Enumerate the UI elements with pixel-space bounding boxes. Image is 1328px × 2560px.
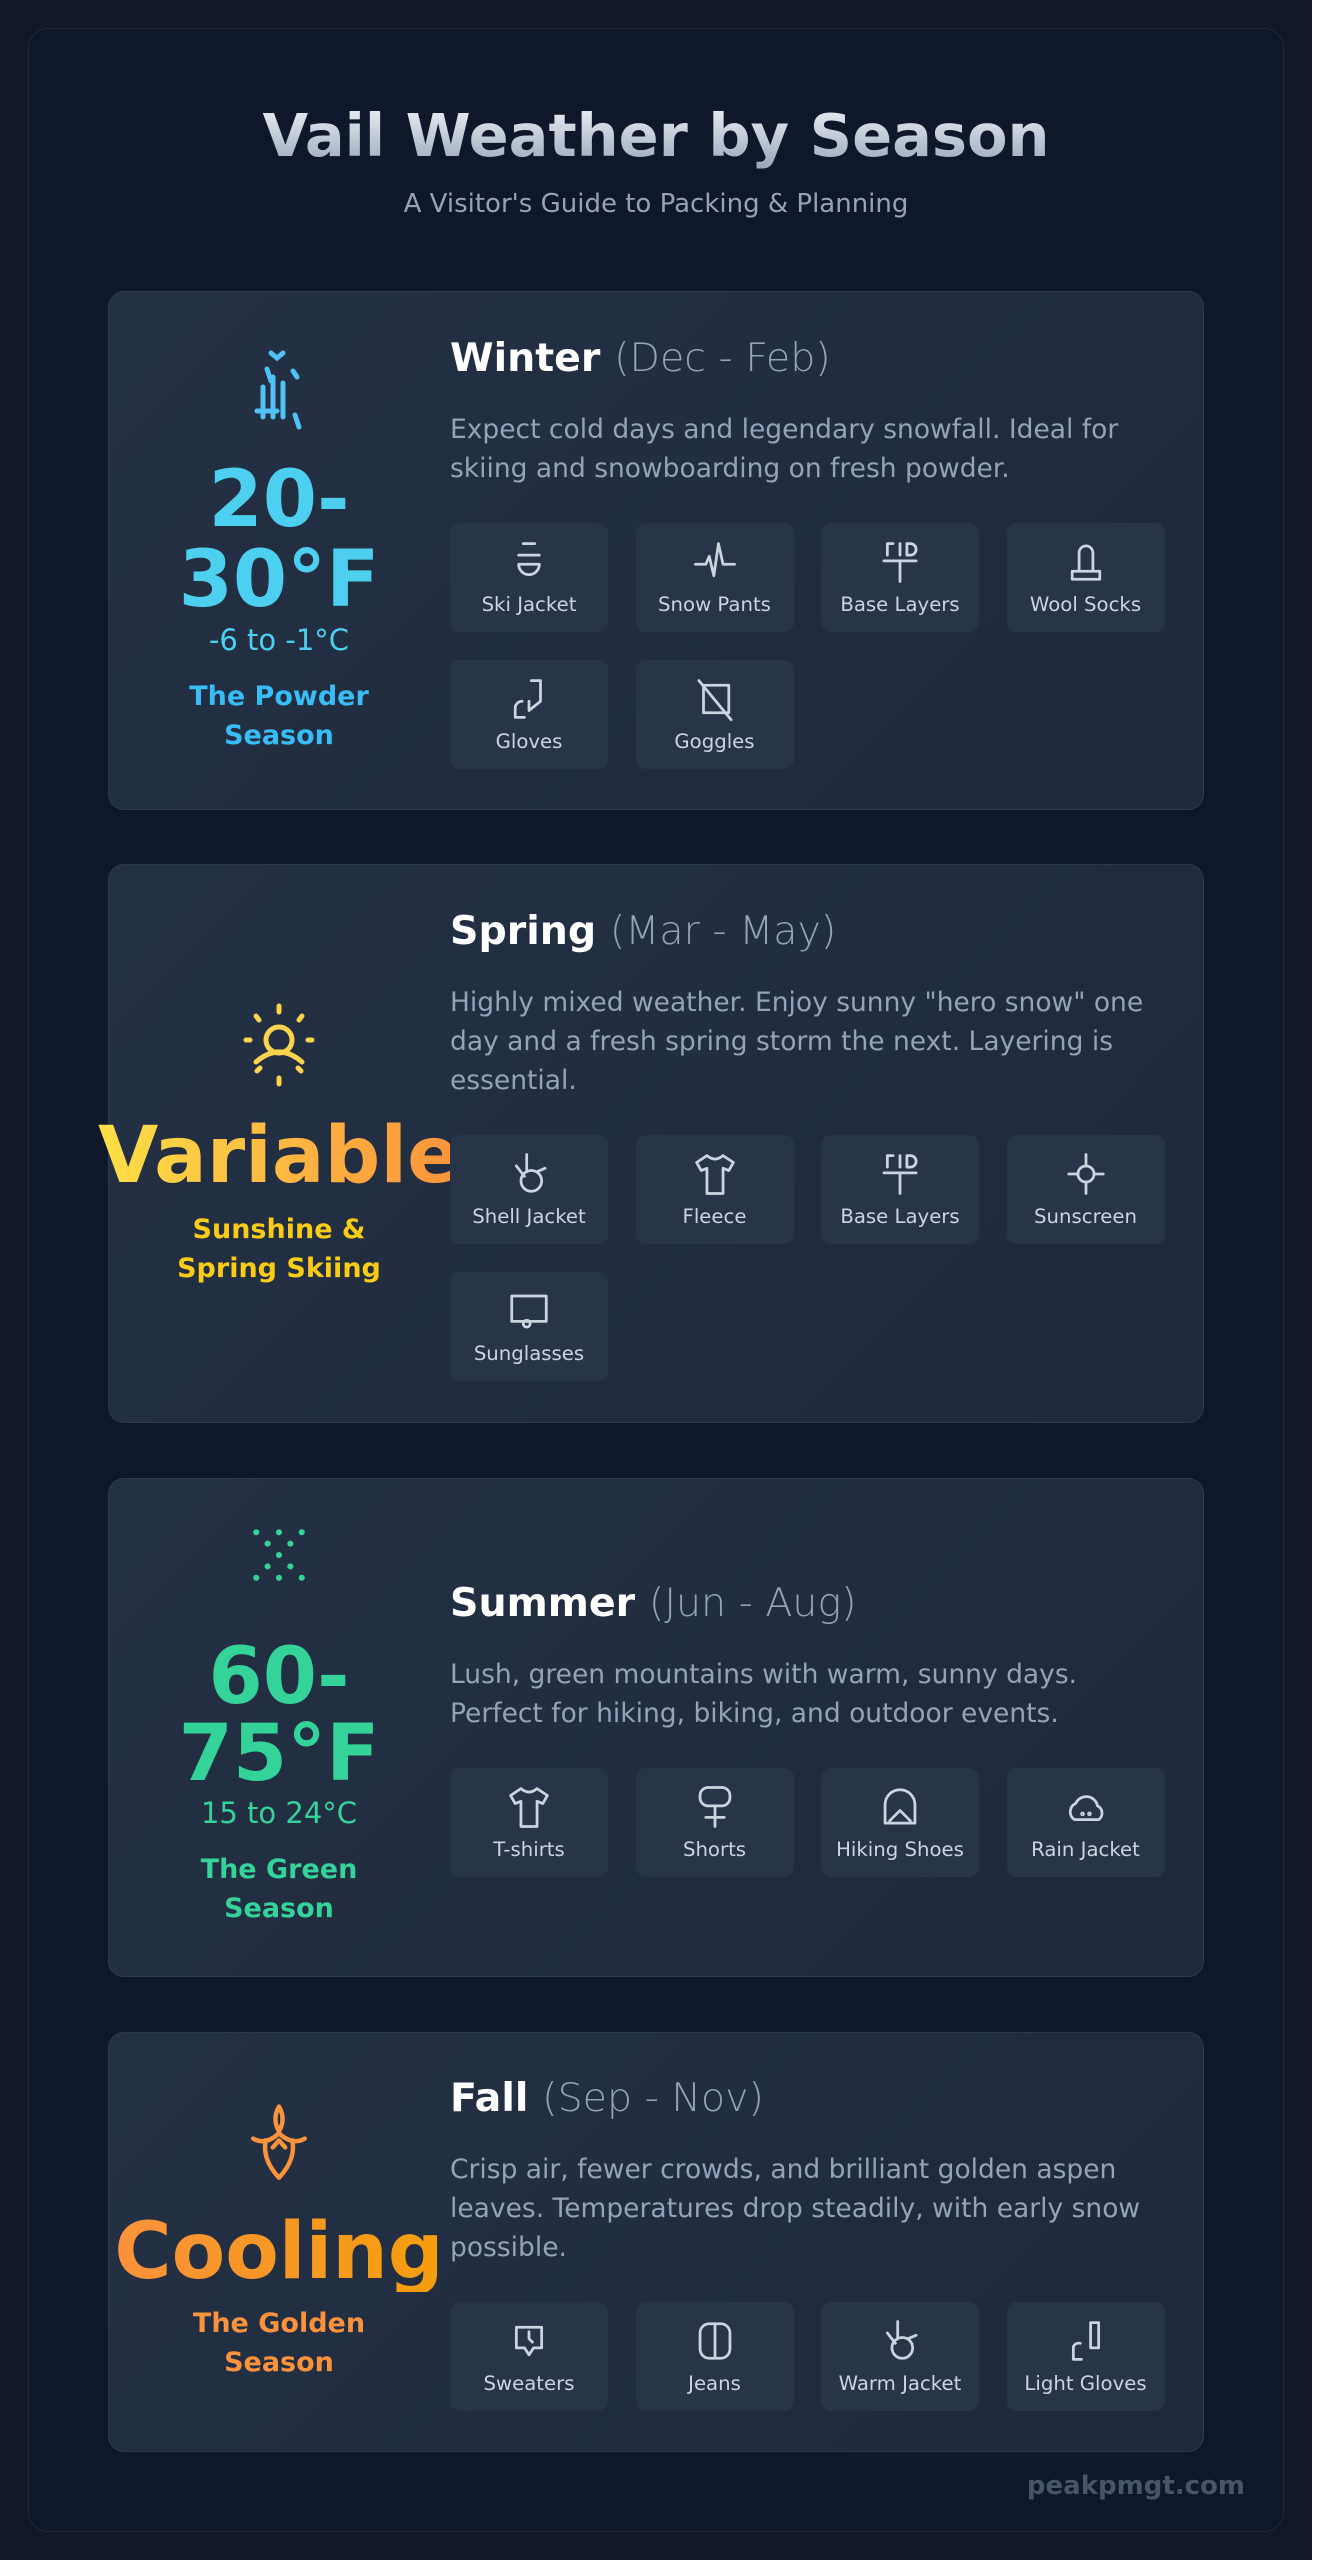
summer temperature column: Season — [224, 1893, 334, 1924]
panel: fall — [108, 2032, 1204, 2452]
packing list: summer: Hiking Shoes — [836, 1838, 964, 1861]
text: winter description: Expect cold days and legendary snowfall. Ideal for skiing and snowboarding on fresh powder. — [450, 414, 1118, 484]
summer details — [450, 1580, 1165, 1877]
winter details — [450, 334, 1165, 769]
packing list: winter: Base Layers — [840, 592, 960, 616]
icon: sparkle dots — [253, 1529, 305, 1581]
packing list: winter — [482, 523, 1165, 769]
spring temperature column — [98, 1004, 460, 1284]
winter temperature column: The Powder — [189, 681, 369, 712]
icon: leaf — [251, 2104, 307, 2180]
text: spring description: Highly mixed weather. Enjoy sunny "hero snow" one day and a fresh spring storm the next. Layering is essential. — [450, 987, 1143, 1096]
icon: snow — [254, 350, 302, 430]
panel: spring — [108, 864, 1204, 1423]
packing list: spring: Fleece — [683, 1205, 746, 1228]
winter temperature column: Season — [224, 720, 334, 751]
summer temperature column — [179, 1529, 379, 1924]
packing list: spring: Sunglasses — [474, 1342, 584, 1365]
packing list: fall: Light Gloves — [1024, 2372, 1147, 2395]
title — [0, 100, 1312, 172]
spring temperature column: Sunshine & — [193, 1214, 365, 1244]
heading: fall: Fall (Sep - Nov) — [450, 2075, 764, 2121]
packing list: spring: Sunscreen — [1034, 1205, 1137, 1228]
packing list: spring: Base Layers — [840, 1205, 960, 1228]
packing list: winter: Snow Pants — [658, 592, 771, 616]
packing list: winter: Wool Socks — [1030, 592, 1141, 616]
panel: winter — [108, 291, 1204, 810]
summer temperature column: 15 to 24°C — [201, 1796, 357, 1830]
packing list: summer: T-shirts — [493, 1838, 565, 1861]
spring details — [450, 908, 1165, 1381]
packing list: summer: Shorts — [683, 1838, 746, 1861]
title: Vail Weather by Season — [262, 101, 1050, 170]
packing list: winter: Goggles — [674, 730, 755, 752]
subtitle: A Visitor's Guide to Packing & Planning — [404, 189, 908, 219]
heading: spring: Spring (Mar - May) — [450, 908, 836, 954]
winter temperature column: -6 to -1°C — [209, 623, 349, 657]
fall temperature column: Season — [224, 2346, 334, 2378]
packing list: fall: Warm Jacket — [839, 2372, 961, 2395]
packing list: spring: Shell Jacket — [472, 1205, 586, 1228]
winter temperature column — [179, 350, 379, 751]
packing list: fall: Sweaters — [484, 2372, 574, 2395]
packing list: summer: Rain Jacket — [1031, 1838, 1140, 1861]
fall temperature column — [114, 2104, 444, 2378]
spring temperature column: Variable — [98, 1110, 460, 1200]
summer temperature column: The Green — [201, 1854, 357, 1885]
icon: sun — [244, 1004, 314, 1086]
packing list: winter: Gloves — [496, 730, 562, 752]
packing list: fall: Jeans — [688, 2372, 741, 2395]
winter temperature column: 30°F — [179, 535, 379, 625]
footer: brand: peakpmgt.com — [1027, 2471, 1245, 2501]
summer temperature column: 75°F — [179, 1709, 379, 1799]
text: summer description: Lush, green mountains with warm, sunny days. Perfect for hiking, biking, and outdoor events. — [450, 1659, 1077, 1729]
fall details — [450, 2075, 1165, 2411]
text: fall description: Crisp air, fewer crowds, and brilliant golden aspen leaves. Temperatures drop steadily, with early snow possible. — [450, 2154, 1140, 2263]
fall temperature column: Cooling — [114, 2206, 444, 2296]
packing list: spring — [450, 1135, 1165, 1381]
packing list: fall — [484, 2302, 1165, 2411]
heading: summer: Summer (Jun - Aug) — [450, 1580, 857, 1626]
fall temperature column: The Golden — [193, 2308, 365, 2338]
winter temperature column: 20- — [209, 455, 349, 545]
packing list: winter: Ski Jacket — [482, 592, 576, 616]
packing list: summer — [493, 1768, 1165, 1877]
heading: winter: Winter (Dec - Feb) — [450, 334, 831, 380]
summer temperature column: 60- — [209, 1632, 349, 1722]
spring temperature column: Spring Skiing — [177, 1252, 381, 1284]
panel: summer — [108, 1478, 1204, 1977]
